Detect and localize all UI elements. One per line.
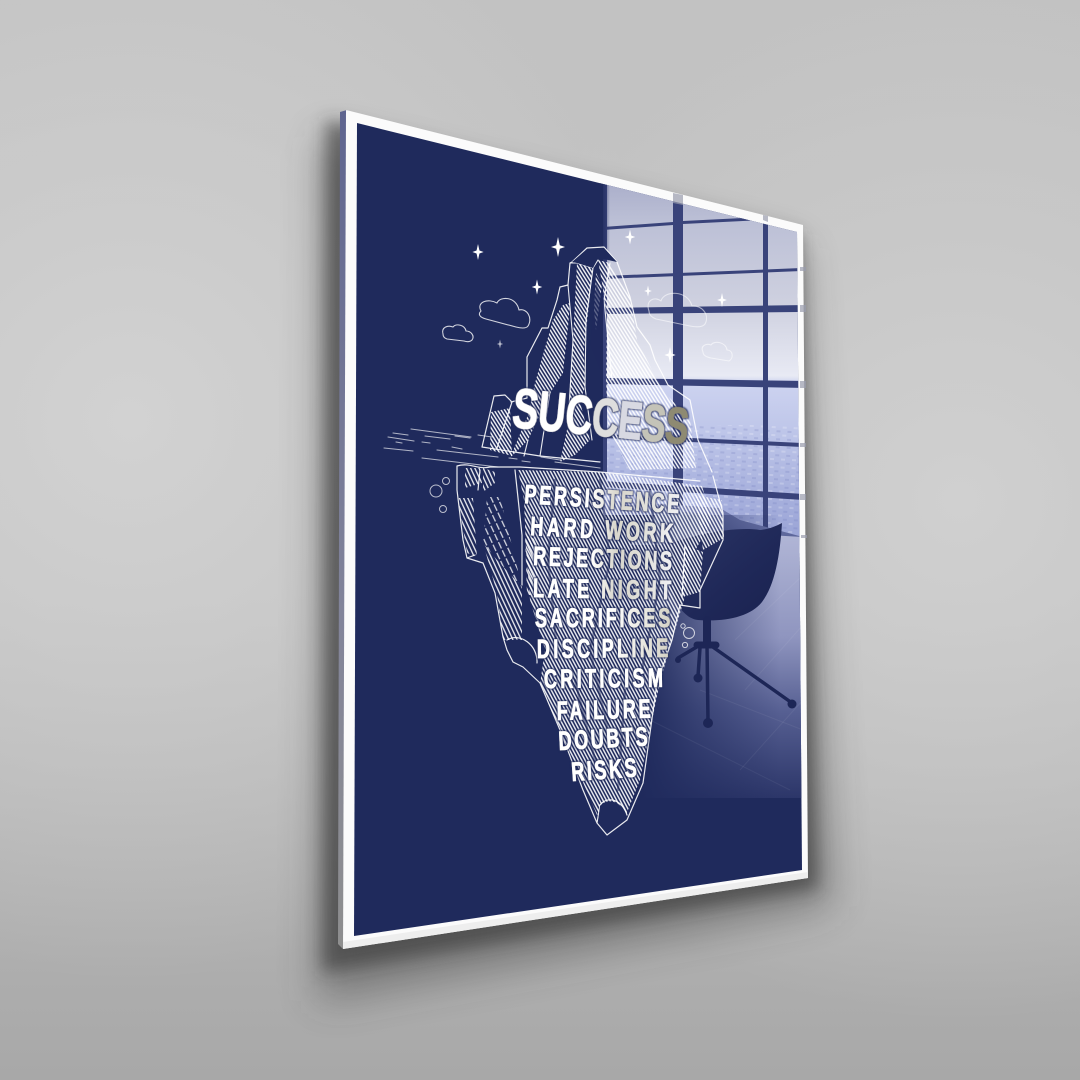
- list of words under the waterline: RISKS: [570, 752, 638, 787]
- bubbles right: [681, 624, 694, 648]
- clouds: [443, 293, 732, 361]
- list of words under the waterline: SACRIFICES: [535, 602, 670, 633]
- poster drop shadow: [318, 120, 832, 1002]
- framed poster: [338, 110, 808, 949]
- navy panel: [354, 123, 802, 936]
- list of words under the waterline: REJECTIONS: [533, 540, 673, 576]
- frame side edge: [338, 110, 347, 949]
- list of words under the waterline: CRITICISM: [544, 662, 663, 694]
- window mullions: [603, 170, 803, 540]
- desk and book: [630, 510, 710, 545]
- white frame: [343, 110, 808, 949]
- list of words under the waterline: [524, 478, 680, 787]
- list of words under the waterline: LATE NIGHT: [533, 572, 672, 605]
- glass reflection of mullions on the frame: [673, 193, 807, 538]
- list of words under the waterline: FAILURE: [556, 693, 651, 726]
- headline: SUCCESS: SUCCESS: [510, 377, 692, 457]
- iceberg illustration: [384, 230, 732, 835]
- list of words under the waterline: DISCIPLINE: [537, 632, 668, 664]
- list of words under the waterline: DOUBTS: [558, 721, 648, 756]
- iceberg below water: [457, 465, 724, 835]
- floor boards: [650, 674, 800, 790]
- window panes: [603, 170, 803, 540]
- list of words under the waterline: PERSISTENCE: [524, 478, 680, 519]
- list of words under the waterline: HARD WORK: [530, 510, 674, 548]
- floor: [650, 531, 802, 798]
- iceberg above water: [482, 247, 712, 472]
- interior below window: [603, 500, 803, 660]
- bubbles left: [430, 478, 450, 512]
- water lines: [384, 429, 600, 468]
- office chair: [664, 523, 796, 728]
- city view through the window: [603, 425, 803, 535]
- stars: [472, 230, 727, 363]
- office photo glare: [600, 170, 803, 798]
